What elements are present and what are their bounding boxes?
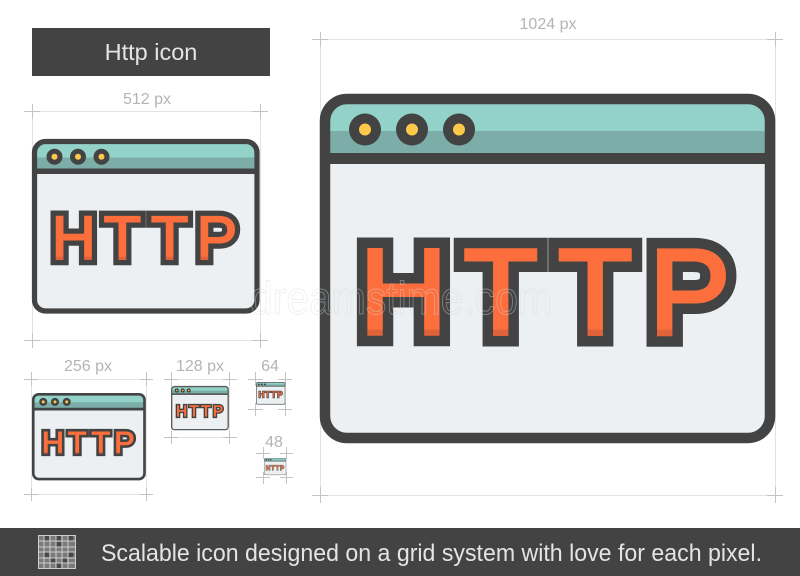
- icon: large browser window: HTTP: [359, 224, 730, 360]
- icon: 128 px browser window: [172, 387, 228, 430]
- guides: 512 px: [24, 91, 268, 348]
- icon: 128 px browser window: HTTP: [176, 403, 223, 420]
- guides: 128 px: 128 px: [176, 358, 224, 375]
- icon: 128 px browser window: HTTP: [176, 403, 223, 420]
- guides: 64 px: 64: [261, 358, 279, 375]
- guides: 64 px: [248, 358, 292, 416]
- icon: 512 px browser window: HTTP: [52, 204, 237, 272]
- watermark: dreamstime.com: [250, 272, 552, 324]
- icon: 256 px browser window: HTTP: [42, 426, 135, 460]
- icon: 512 px browser window: HTTP: [52, 204, 237, 272]
- footer text: Scalable icon designed on a grid system with love for each pixel.: [101, 540, 762, 567]
- icon: 256 px browser window: [33, 394, 144, 479]
- guides: 128 px: [164, 358, 237, 444]
- icon: 256 px browser window: HTTP: [42, 426, 135, 460]
- guides: 48 px: [256, 434, 293, 484]
- guides: 256 px: [24, 358, 153, 501]
- title: [32, 28, 270, 76]
- icon: 48 px browser window: [264, 458, 286, 475]
- guides: 256 px: 256 px: [64, 358, 112, 375]
- icon: 512 px browser window: [34, 142, 257, 311]
- icon: 48 px browser window: HTTP: [266, 466, 284, 472]
- title: Http icon: [105, 39, 197, 65]
- icon: 64 px browser window: HTTP: [259, 391, 283, 400]
- icon: pixel grid: [38, 535, 76, 569]
- footer bar: [0, 528, 800, 576]
- guides: 48 px: 48: [265, 434, 283, 451]
- guides: 1024 px: 1024 px: [520, 16, 576, 33]
- icon: 64 px browser window: [256, 382, 285, 404]
- icon: large browser window: HTTP: [359, 224, 730, 360]
- icon: 48 px browser window: HTTP: [266, 466, 284, 472]
- guides: 512 px: 512 px: [123, 91, 171, 108]
- icon: 64 px browser window: HTTP: [259, 391, 283, 400]
- icon: large browser window: [325, 99, 770, 438]
